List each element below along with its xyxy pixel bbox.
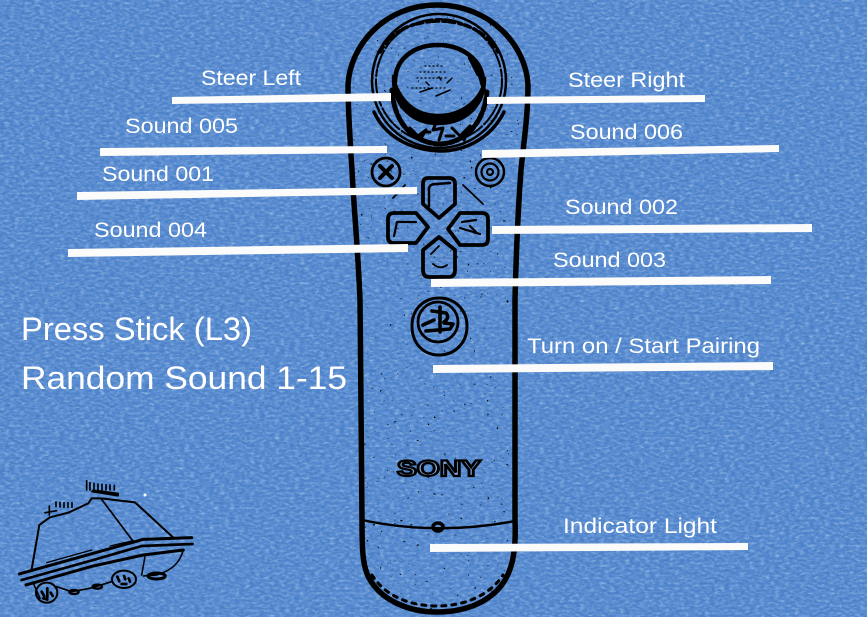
line: sound 003 [431,276,771,287]
d-pad surrounding arcs [393,185,483,204]
base divider line [362,520,515,528]
indicator light [433,523,443,531]
heading: press stick random sound [21,311,347,396]
d-pad right [448,213,488,245]
label: steer right: Steer Right [568,69,685,92]
line: sound 005 [100,146,387,156]
line: indicator light [430,543,748,552]
line: steer right [487,95,705,104]
ink speckle shading [345,0,530,617]
d-pad left [388,213,428,243]
label: turn on / start pairing: Turn on / Start Pairing [527,335,760,358]
lower edge shading [372,575,503,606]
heading: press stick random sound: Press Stick (L3) [21,311,252,347]
line: sound 001 [77,187,417,200]
cross button [372,158,400,186]
line: sound 002 [492,224,812,234]
label: sound 006: Sound 006 [570,121,683,144]
line: turn on [433,362,773,373]
tank wheels [36,583,57,603]
line: sound 004 [68,244,408,257]
label: steer left: Steer Left [201,67,301,90]
label: indicator light: Indicator Light [563,515,717,538]
d-pad down [423,237,455,277]
small white speck [144,494,146,496]
label: sound 002: Sound 002 [565,196,678,219]
SONY logo: SONY [397,456,481,481]
controller illustration [345,0,530,617]
analog stick and rings [372,14,506,151]
label: sound 001: Sound 001 [102,163,214,186]
labels [94,67,760,538]
label: sound 003: Sound 003 [553,249,666,272]
label: sound 005: Sound 005 [125,115,238,138]
line: steer left [172,93,391,104]
white leader lines [68,93,812,552]
PS button [412,298,467,355]
heading: press stick random sound: Random Sound 1-15 [21,360,347,396]
controller body outline [348,5,528,612]
icon: tank robot sketch [19,481,193,603]
d-pad up [423,178,455,218]
label: sound 004: Sound 004 [94,219,207,242]
line: sound 006 [482,145,779,158]
circle button [476,158,504,186]
